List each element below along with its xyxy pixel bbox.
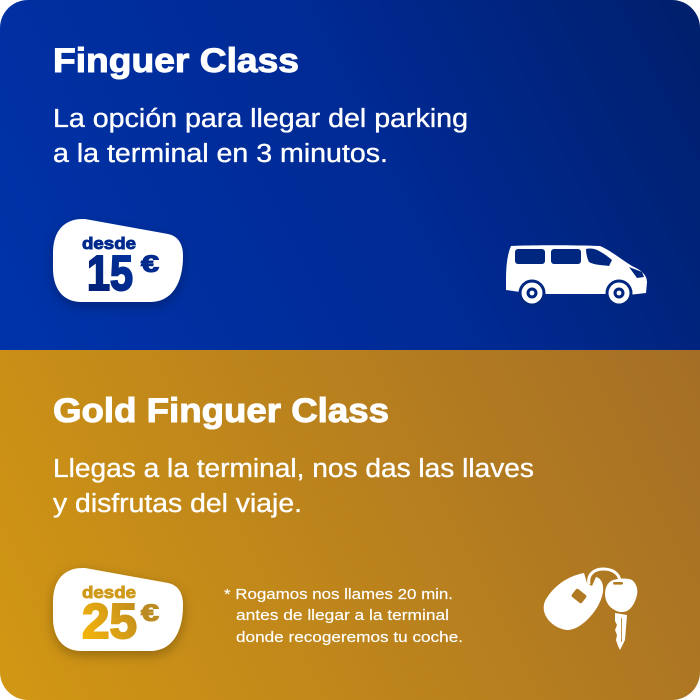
text block: gold description: Llegas a la terminal, nos das las llaves bbox=[53, 455, 534, 483]
price badge: desde 25 €: desde bbox=[82, 583, 136, 602]
text block: gold description bbox=[53, 455, 534, 518]
price badge: desde 25 € bbox=[53, 568, 183, 651]
panel: Finguer Class bbox=[0, 0, 700, 350]
price badge: desde 15 €: € bbox=[141, 251, 159, 278]
text block: footnote: antes de llegar a la terminal bbox=[236, 608, 449, 624]
text block: blue description: La opción para llegar del parking bbox=[53, 105, 468, 133]
icon: car keys bbox=[544, 569, 637, 650]
heading: Gold Finguer Class: Gold Finguer Class bbox=[53, 392, 389, 430]
panel: Gold Finguer Class bbox=[0, 350, 700, 700]
text block: blue description bbox=[54, 108, 466, 162]
text block: footnote bbox=[224, 587, 463, 646]
heading: Finguer Class: Finguer Class bbox=[53, 42, 299, 80]
text block: footnote: * Rogamos nos llames 20 min. bbox=[224, 587, 453, 603]
price badge: desde 25 €: € bbox=[141, 600, 159, 627]
price badge: desde 15 €: desde bbox=[82, 234, 136, 253]
icon: van bbox=[506, 245, 647, 306]
price badge: desde 15 € bbox=[53, 219, 183, 302]
text block: footnote: donde recogeremos tu coche. bbox=[236, 630, 463, 646]
price badge: desde 25 €: 25 bbox=[82, 595, 137, 649]
text block: gold description: y disfrutas del viaje. bbox=[53, 490, 302, 518]
price badge: desde 15 €: 15 bbox=[87, 247, 133, 301]
text block: blue description: a la terminal en 3 minutos. bbox=[53, 140, 388, 168]
